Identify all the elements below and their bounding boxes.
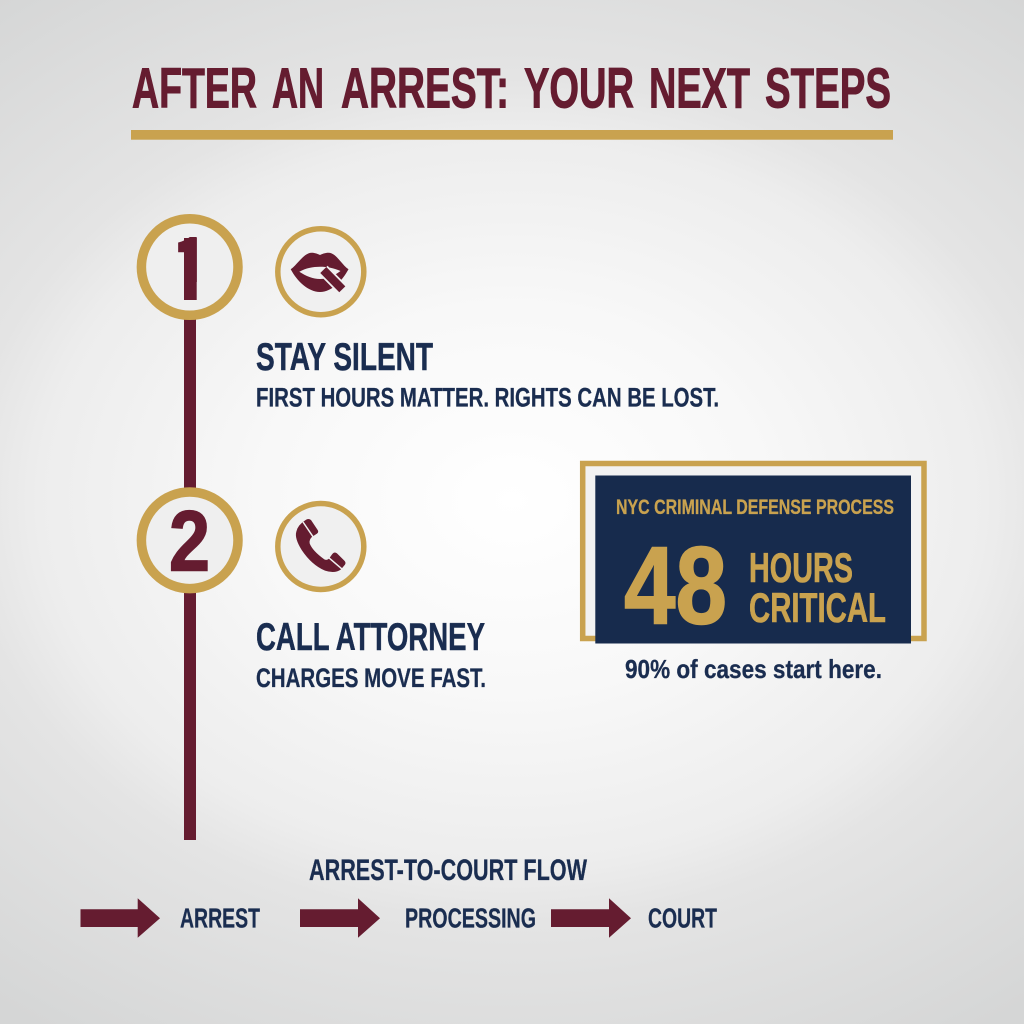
icon: telephone bbox=[278, 504, 364, 590]
title: NEXT bbox=[649, 56, 750, 120]
flow label: arrest: ARREST bbox=[180, 902, 260, 934]
title: STEPS bbox=[765, 56, 891, 120]
big number: 48 bbox=[624, 524, 727, 648]
flow heading: ARREST-TO-COURT FLOW bbox=[309, 854, 587, 887]
step 2 bbox=[141, 492, 486, 693]
title: AN bbox=[272, 56, 324, 120]
step 1 description: FIRST HOURS MATTER. RIGHTS CAN BE LOST. bbox=[256, 382, 719, 412]
title: YOUR bbox=[524, 56, 634, 120]
title underline bbox=[131, 130, 893, 140]
arrow 1 bbox=[80, 898, 160, 938]
label: critical: CRITICAL bbox=[749, 584, 886, 631]
callout heading: NYC CRIMINAL DEFENSE PROCESS bbox=[616, 495, 894, 519]
step 1 heading: STAY SILENT bbox=[256, 336, 433, 379]
icon: lips with finger bbox=[278, 229, 364, 315]
flow diagram bbox=[80, 854, 717, 938]
step 1 number badge: 1 bbox=[172, 200, 210, 325]
title: AFTER bbox=[132, 56, 257, 120]
title: ARREST: bbox=[341, 56, 509, 120]
arrow 2 bbox=[300, 898, 380, 938]
timeline line bbox=[184, 318, 196, 840]
label: hours: HOURS bbox=[749, 544, 853, 591]
arrow 3 bbox=[551, 898, 631, 938]
callout caption: 90% of cases start here. bbox=[625, 654, 882, 684]
step 2 number badge bbox=[141, 492, 238, 590]
step 2 description: CHARGES MOVE FAST. bbox=[256, 663, 486, 693]
flow label: processing: PROCESSING bbox=[405, 902, 536, 934]
step 2 number badge: 2 bbox=[169, 495, 210, 590]
callout: 48 hours critical bbox=[583, 464, 924, 684]
title bbox=[131, 56, 893, 140]
step 1 bbox=[141, 200, 719, 412]
callout navy panel bbox=[595, 476, 911, 644]
callout gold frame bbox=[583, 464, 924, 638]
flow label: court: COURT bbox=[648, 902, 717, 934]
step 2 heading: CALL ATTORNEY bbox=[256, 616, 485, 659]
step 1 number badge bbox=[141, 200, 238, 325]
